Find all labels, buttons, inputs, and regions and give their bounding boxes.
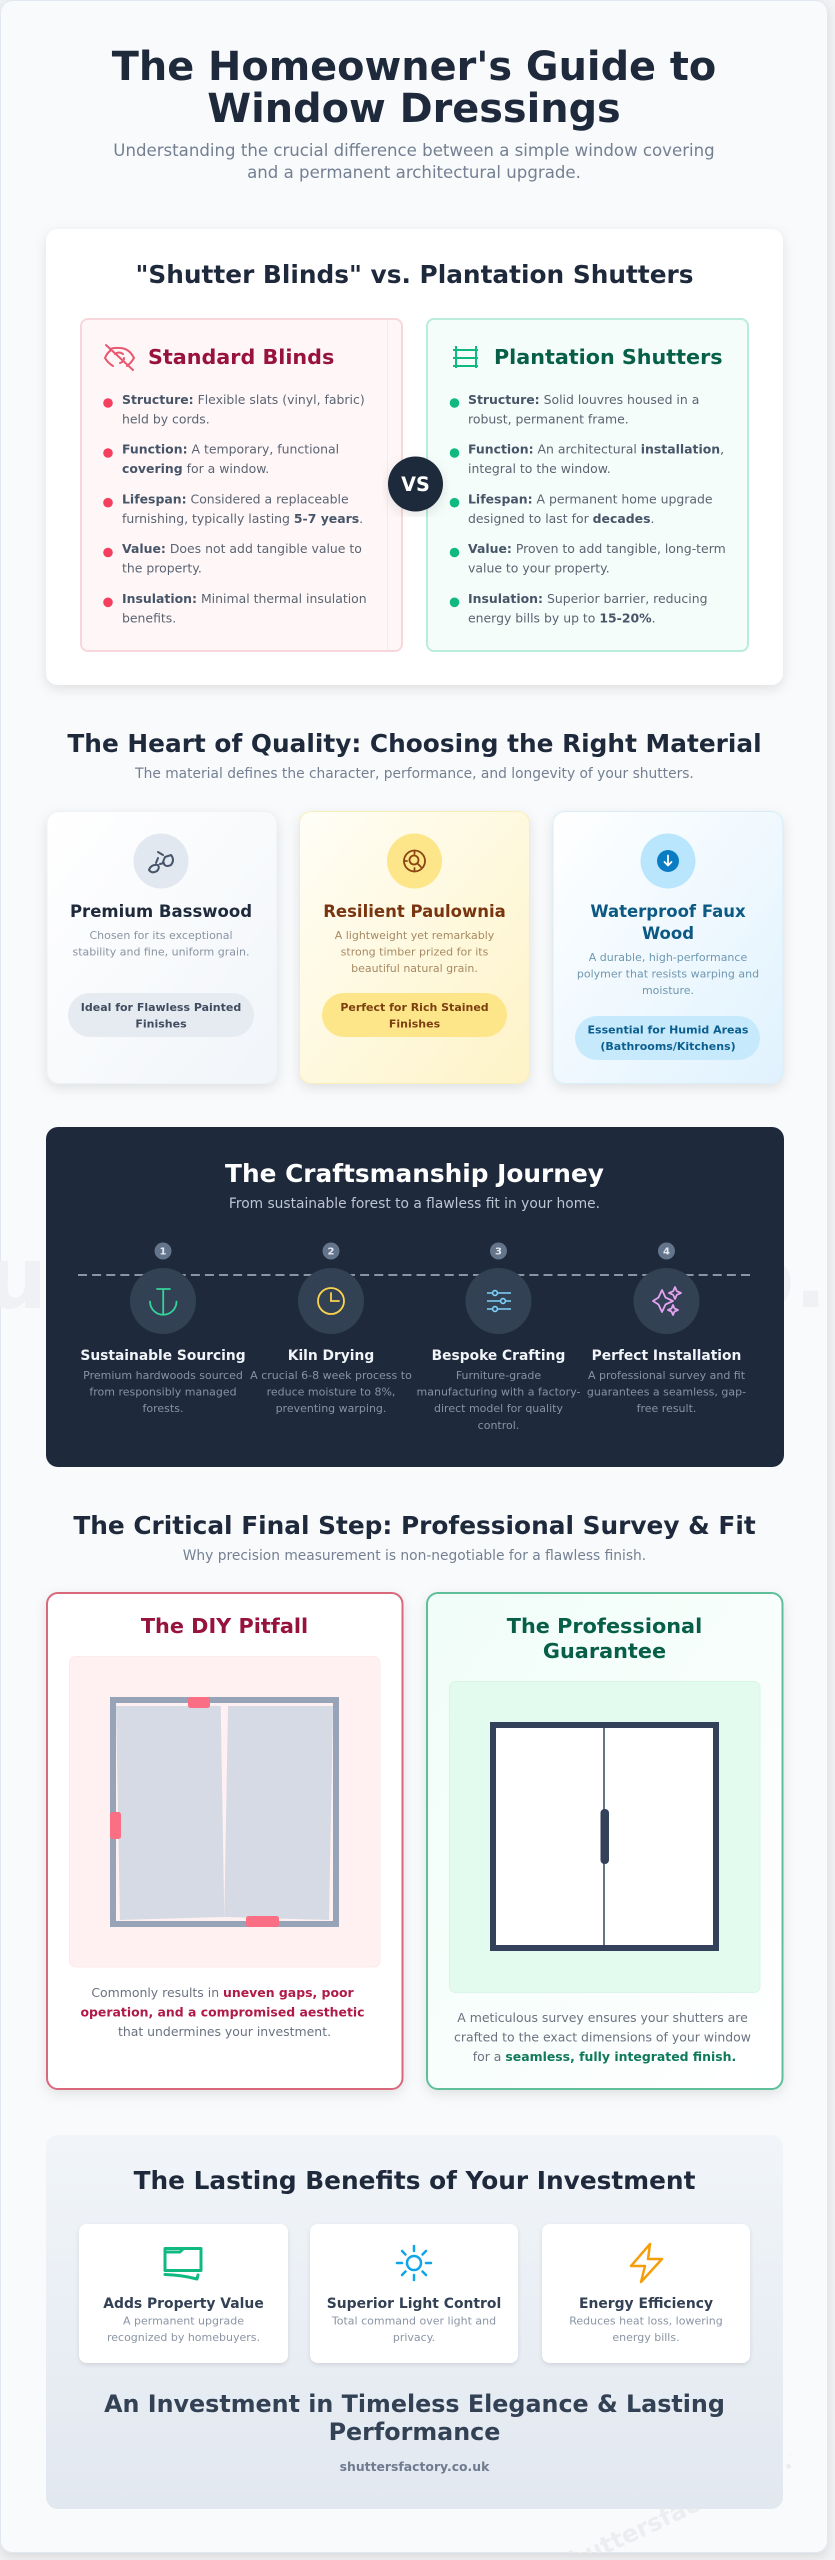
basswood title: Premium Basswood [70,902,252,921]
plantation shutters list: Value: [468,541,512,556]
professional description: A meticulous survey ensures your shutters are [457,2010,748,2025]
standard blinds list: Value: [122,541,166,556]
survey heading: The Critical Final Step: Professional Survey & Fit [73,1511,756,1540]
step 1: Premium hardwoods sourced [83,1369,243,1382]
timeline line [78,1274,750,1276]
card: professional guarantee [427,1593,782,2089]
step 4: Perfect Installation [592,1348,741,1364]
standard blinds heading: Standard Blinds [148,345,334,369]
standard blinds list: Structure: [122,392,194,407]
plantation shutters list: value to your property. [468,561,610,576]
card: light control [310,2224,518,2363]
journey subtitle: From sustainable forest to a flawless fit in your home. [229,1196,600,1212]
icon: basswood [134,834,188,888]
basswood pill [68,993,254,1037]
professional description: crafted to the exact dimensions of your window [454,2030,751,2044]
faux wood description: polymer that resists warping and [577,968,759,981]
comparison heading: "Shutter Blinds" vs. Plantation Shutters [135,260,694,289]
icon: sliders [487,1291,511,1311]
card: paulownia [300,812,530,1084]
panel: standard blinds [81,319,402,651]
card: energy efficiency: Energy Efficiency [579,2296,713,2312]
professional title: Guarantee [543,1639,666,1663]
benefits heading: The Lasting Benefits of Your Investment [134,2166,696,2195]
title: The Homeowner's Guide to [112,44,716,90]
step 3: direct model for quality [434,1402,563,1415]
standard blinds list: Lifespan: [122,492,187,506]
standard blinds list: Minimal thermal insulation [197,591,367,606]
title: Window Dressings [207,86,621,132]
step 2: preventing warping. [276,1402,386,1415]
DIY description: that undermines your investment. [118,2024,331,2039]
step 1 [80,1242,246,1415]
step 3: 3 [495,1247,502,1258]
plantation shutters list: Insulation: [468,591,543,606]
card: basswood [47,812,277,1084]
survey subtitle: Why precision measurement is non-negotiable for a flawless finish. [183,1548,646,1564]
diagram: poorly fitted shutter [70,1656,380,1967]
faux wood pill [575,1016,760,1060]
website: shuttersfactory.co.uk [340,2459,490,2474]
icon: clock [318,1288,344,1314]
DIY title: The DIY Pitfall [141,1614,308,1638]
panel: lasting benefits [46,2135,783,2509]
panel: comparison [46,229,783,685]
journey heading: The Craftsmanship Journey [225,1159,604,1188]
card: DIY pitfall [47,1593,402,2089]
faux wood description: A durable, high-performance [589,951,747,964]
standard blinds list: A temporary, functional [188,442,339,457]
plantation shutters heading: Plantation Shutters [494,345,723,369]
subtitle: and a permanent architectural upgrade. [247,163,581,182]
card: light control: Total command over light and [331,2314,496,2328]
panel: craftsmanship journey [46,1127,784,1467]
card: light control: Superior Light Control [327,2296,501,2312]
icon: paulownia [387,834,442,888]
paulownia description: strong timber prized for its [341,946,489,959]
step 2 [250,1242,412,1415]
step 3: control. [478,1419,519,1432]
VS badge [388,456,443,512]
plantation shutters list: 15-20%. [599,610,656,626]
professional description: for a [473,2049,505,2064]
step 2: A crucial 6-8 week process to [250,1369,412,1382]
plantation shutters list: An architectural installation, [538,442,724,457]
paulownia pill [322,993,507,1037]
plantation shutters list: Proven to add tangible, long-term [512,541,726,556]
card: energy efficiency [542,2224,750,2363]
diagram: perfectly fitted shutter [450,1682,760,1992]
step 3: Furniture-grade [456,1369,541,1382]
plantation shutters list: integral to the window. [468,461,611,476]
plantation shutters list: A permanent home upgrade [533,492,713,506]
icon: eye off [105,345,134,370]
step 4: free result. [637,1402,696,1415]
section: survey and fit [47,1511,782,2089]
section: materials [47,729,783,1084]
basswood description: Chosen for its exceptional [89,929,233,942]
standard blinds list: Flexible slats (vinyl, fabric) [194,392,365,407]
icon: lightning bolt [631,2244,662,2282]
step 4: A professional survey and fit [588,1369,746,1382]
card: property value [79,2224,288,2363]
faux wood title: Waterproof Faux [590,902,746,921]
step 2: Kiln Drying [288,1348,374,1364]
plantation shutters list: Superior barrier, reducing [543,591,708,606]
card: light control: privacy. [393,2331,435,2344]
DIY description: operation, and a compromised aesthetic [80,2004,365,2020]
standard blinds list: furnishing, typically lasting [122,511,294,526]
step 2: 2 [328,1247,335,1258]
step 4: guarantees a seamless, gap- [587,1386,746,1399]
standard blinds list: held by cords. [122,412,210,426]
faux wood title: Wood [642,924,694,943]
standard blinds list: Does not add tangible value to [166,541,362,556]
step 3: Bespoke Crafting [432,1348,565,1364]
card: faux wood [553,812,783,1084]
bullet markers [103,398,113,607]
step 1: forests. [143,1402,183,1415]
standard blinds list: the property. [122,561,202,576]
subtitle: Understanding the crucial difference between a simple window covering [113,141,715,160]
standard blinds list: Insulation: [122,591,197,606]
VS badge: VS [401,473,430,496]
step 1: from responsibly managed [89,1386,237,1399]
paulownia description: A lightweight yet remarkably [335,929,495,942]
plantation shutters list: robust, permanent frame. [468,412,629,426]
watermark: side text: o. [735,1228,827,1328]
closing statement: An Investment in Timeless Elegance & Lasting [104,2390,725,2418]
standard blinds list: Considered a replaceable [187,492,349,506]
faux wood pill: (Bathrooms/Kitchens) [600,1040,736,1053]
step 3: manufacturing with a factory- [417,1386,581,1399]
materials heading: The Heart of Quality: Choosing the Right Material [67,729,762,758]
basswood pill: Ideal for Flawless Painted [81,1001,241,1014]
paulownia title: Resilient Paulownia [323,902,506,921]
panel: plantation shutters [427,319,748,651]
icon: shutter [453,346,478,368]
professional description: seamless, fully integrated finish. [505,2049,736,2064]
paulownia description: beautiful natural grain. [351,962,478,975]
icon: sun [397,2246,431,2280]
card: energy efficiency: Reduces heat loss, lowering [569,2314,723,2328]
plantation shutters list: Function: [468,442,534,457]
card: property value: recognized by homebuyers. [107,2331,260,2344]
bullet markers [450,398,459,607]
standard blinds list: Function: [122,442,188,457]
basswood description: stability and fine, uniform grain. [72,946,250,959]
step 2: reduce moisture to 8%, [267,1386,395,1399]
gap marker: bottom [246,1916,279,1927]
step 1: 1 [160,1247,167,1258]
header [112,44,716,182]
gap marker: top [188,1697,210,1708]
closing statement: Performance [329,2418,500,2446]
DIY description: Commonly results in [91,1985,223,2000]
plantation shutters list: energy bills by up to [468,610,599,626]
DIY description: uneven gaps, poor [223,1985,355,2000]
step 4 [587,1242,746,1415]
gap marker: left [110,1812,121,1839]
step 3 [417,1242,581,1432]
plantation shutters list: Structure: [468,392,540,407]
professional title: The Professional [507,1614,702,1638]
faux wood pill: Essential for Humid Areas [588,1024,749,1036]
plantation shutters list: designed to last for [468,511,593,526]
icon: anchor [150,1289,176,1315]
plantation shutters list: Solid louvres housed in a [540,392,699,407]
card: property value: Adds Property Value [103,2296,264,2312]
standard blinds list: 5-7 years. [294,511,363,526]
plantation shutters list: decades. [593,511,654,526]
standard blinds list: for a window. [183,461,269,476]
paulownia pill: Perfect for Rich Stained [340,1001,489,1014]
card: energy efficiency: energy bills. [612,2331,680,2344]
paulownia pill: Finishes [389,1018,441,1030]
step 4: 4 [663,1247,670,1258]
card: property value: A permanent upgrade [123,2314,244,2328]
icon: property value [165,2248,201,2279]
standard blinds list: benefits. [122,610,176,626]
plantation shutters list: Lifespan: [468,492,533,506]
standard blinds list: covering [122,461,183,476]
icon: sparkles [653,1287,681,1315]
faux wood description: moisture. [642,984,694,997]
step 1: Sustainable Sourcing [80,1348,246,1364]
basswood pill: Finishes [135,1018,187,1030]
icon: faux wood [640,834,696,888]
materials subtitle: The material defines the character, performance, and longevity of your shutters. [134,766,694,782]
watermark: side text [0,1261,818,1309]
